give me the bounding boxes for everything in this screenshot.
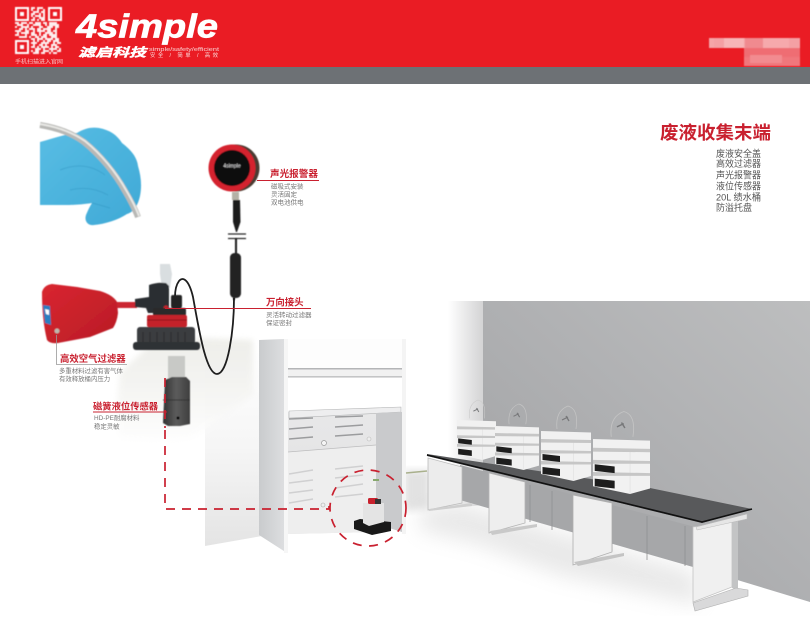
hood vent slots [289,416,363,439]
red collar [147,315,187,327]
alarm leader [257,180,319,182]
sensor details: 稳定灵敏 [94,422,120,430]
callout: level sensor [93,400,167,430]
second bench leg [489,473,525,533]
jug [363,503,384,526]
QR caption: 手机扫描进入官网 [15,58,63,66]
header band [0,0,810,84]
callout: alarm [257,168,319,206]
alarm connector [232,192,239,200]
fume hood [259,339,406,553]
screw cap [137,327,195,344]
air filter heading: 高效空气过滤器 [60,353,126,364]
wall floor shadow right of hood [404,470,430,511]
sensor details [94,413,140,430]
mosaic contact block [709,38,800,66]
left wall behind hood [205,345,262,546]
callout: swivel joint [165,296,312,327]
swivel leader [165,308,311,310]
top collar [153,308,186,316]
alarm details: 灵活固定 [271,190,298,198]
ghost waste bottle [117,338,253,445]
air filter and fittings [42,264,200,426]
slogan English: simple/safety/efficient [149,47,220,53]
logo wordmark: 4simple [75,8,218,44]
blue glove [40,128,141,225]
alarm details [271,182,304,206]
swivel details [266,310,312,327]
component list: 废液安全盖 [716,148,761,159]
red filter body [42,284,118,343]
alarm heading: 声光报警器 [270,168,318,180]
slogan Chinese: 安全 / 简单 / 高效 [150,51,219,59]
alarm face [214,150,250,186]
tube outer [40,125,138,217]
third bench leg [573,495,612,565]
component list [716,148,762,213]
dashed link [165,378,329,509]
hood right inner side [376,412,402,532]
air filter details: 有效释放桶内压力 [59,374,110,383]
vent top [160,264,172,288]
alarm details: 双电池供电 [271,198,304,206]
instrument stack 2 [495,404,539,470]
jug cap [368,498,378,504]
sound and light alarm [208,144,260,300]
right white wall [404,301,484,512]
cap flange [133,342,200,350]
component list: 20L 绩水桶 [716,192,761,202]
component list: 防溢托盘 [716,202,752,213]
dashed link and callout circle [165,378,406,546]
hood side panel [259,339,287,553]
cabinet run [460,465,695,567]
bench top [427,454,752,523]
filter grey dot [54,328,60,334]
elbow connector [135,283,169,313]
sensor leader [93,411,167,413]
front bench leg [693,522,732,602]
level sensor [163,377,190,426]
green tube [373,479,379,481]
filter neck [117,302,137,308]
bench instruments and table [427,400,752,611]
instrument stack 4 [593,412,650,494]
hood sash glass [288,378,402,410]
dashed circle [330,470,406,546]
swivel details: 保证密封 [266,318,292,327]
title: 废液收集末端 [660,122,771,143]
swivel heading: 万向接头 [266,296,304,308]
hood upper panel [288,339,403,369]
sash handle [289,407,401,418]
sensor details: HD-PE耐腐材料 [94,413,140,422]
swivel details: 灵活转动过滤器 [266,310,312,319]
instrument stack 1 [457,400,496,460]
tube highlight [40,124,139,216]
cable gland [171,295,182,308]
cable break marks [228,234,246,238]
sensor heading: 磁簧液位传感器 [93,400,159,412]
component list: 声光报警器 [716,170,762,180]
gloved hand with tube [40,124,141,225]
floor shadow under bench [420,503,700,605]
waste jug on tray [354,480,391,535]
alarm red ring [208,144,256,192]
grey lab wall [483,301,810,602]
bottle stalk [168,356,185,378]
air filter details [59,366,124,383]
logo Chinese name: 滤启科技 [78,46,149,60]
air filter leader [56,335,127,364]
spill tray [354,519,391,535]
hood inner back [288,410,376,534]
component list: 高效过滤器 [716,158,762,169]
filter blue label [43,305,51,325]
alarm details: 磁吸式安装 [271,182,304,190]
hood front frame [284,339,288,553]
alarm face logo: 4simple [223,164,241,170]
hood bolts [322,440,326,446]
signal cable loop [175,279,234,374]
QR code [15,8,61,53]
alarm housing [212,144,260,192]
glove creases [60,166,110,208]
inline connector [234,238,236,300]
callout: air filter [56,335,127,383]
component list: 液位传感器 [716,180,762,192]
air filter details: 多重材料过滤有害气体 [59,366,124,375]
instrument stack 3 [541,406,591,481]
back bench leg [428,458,462,510]
hood right post [402,339,406,534]
hood lower back [288,445,376,534]
pipe on wall [406,471,427,473]
